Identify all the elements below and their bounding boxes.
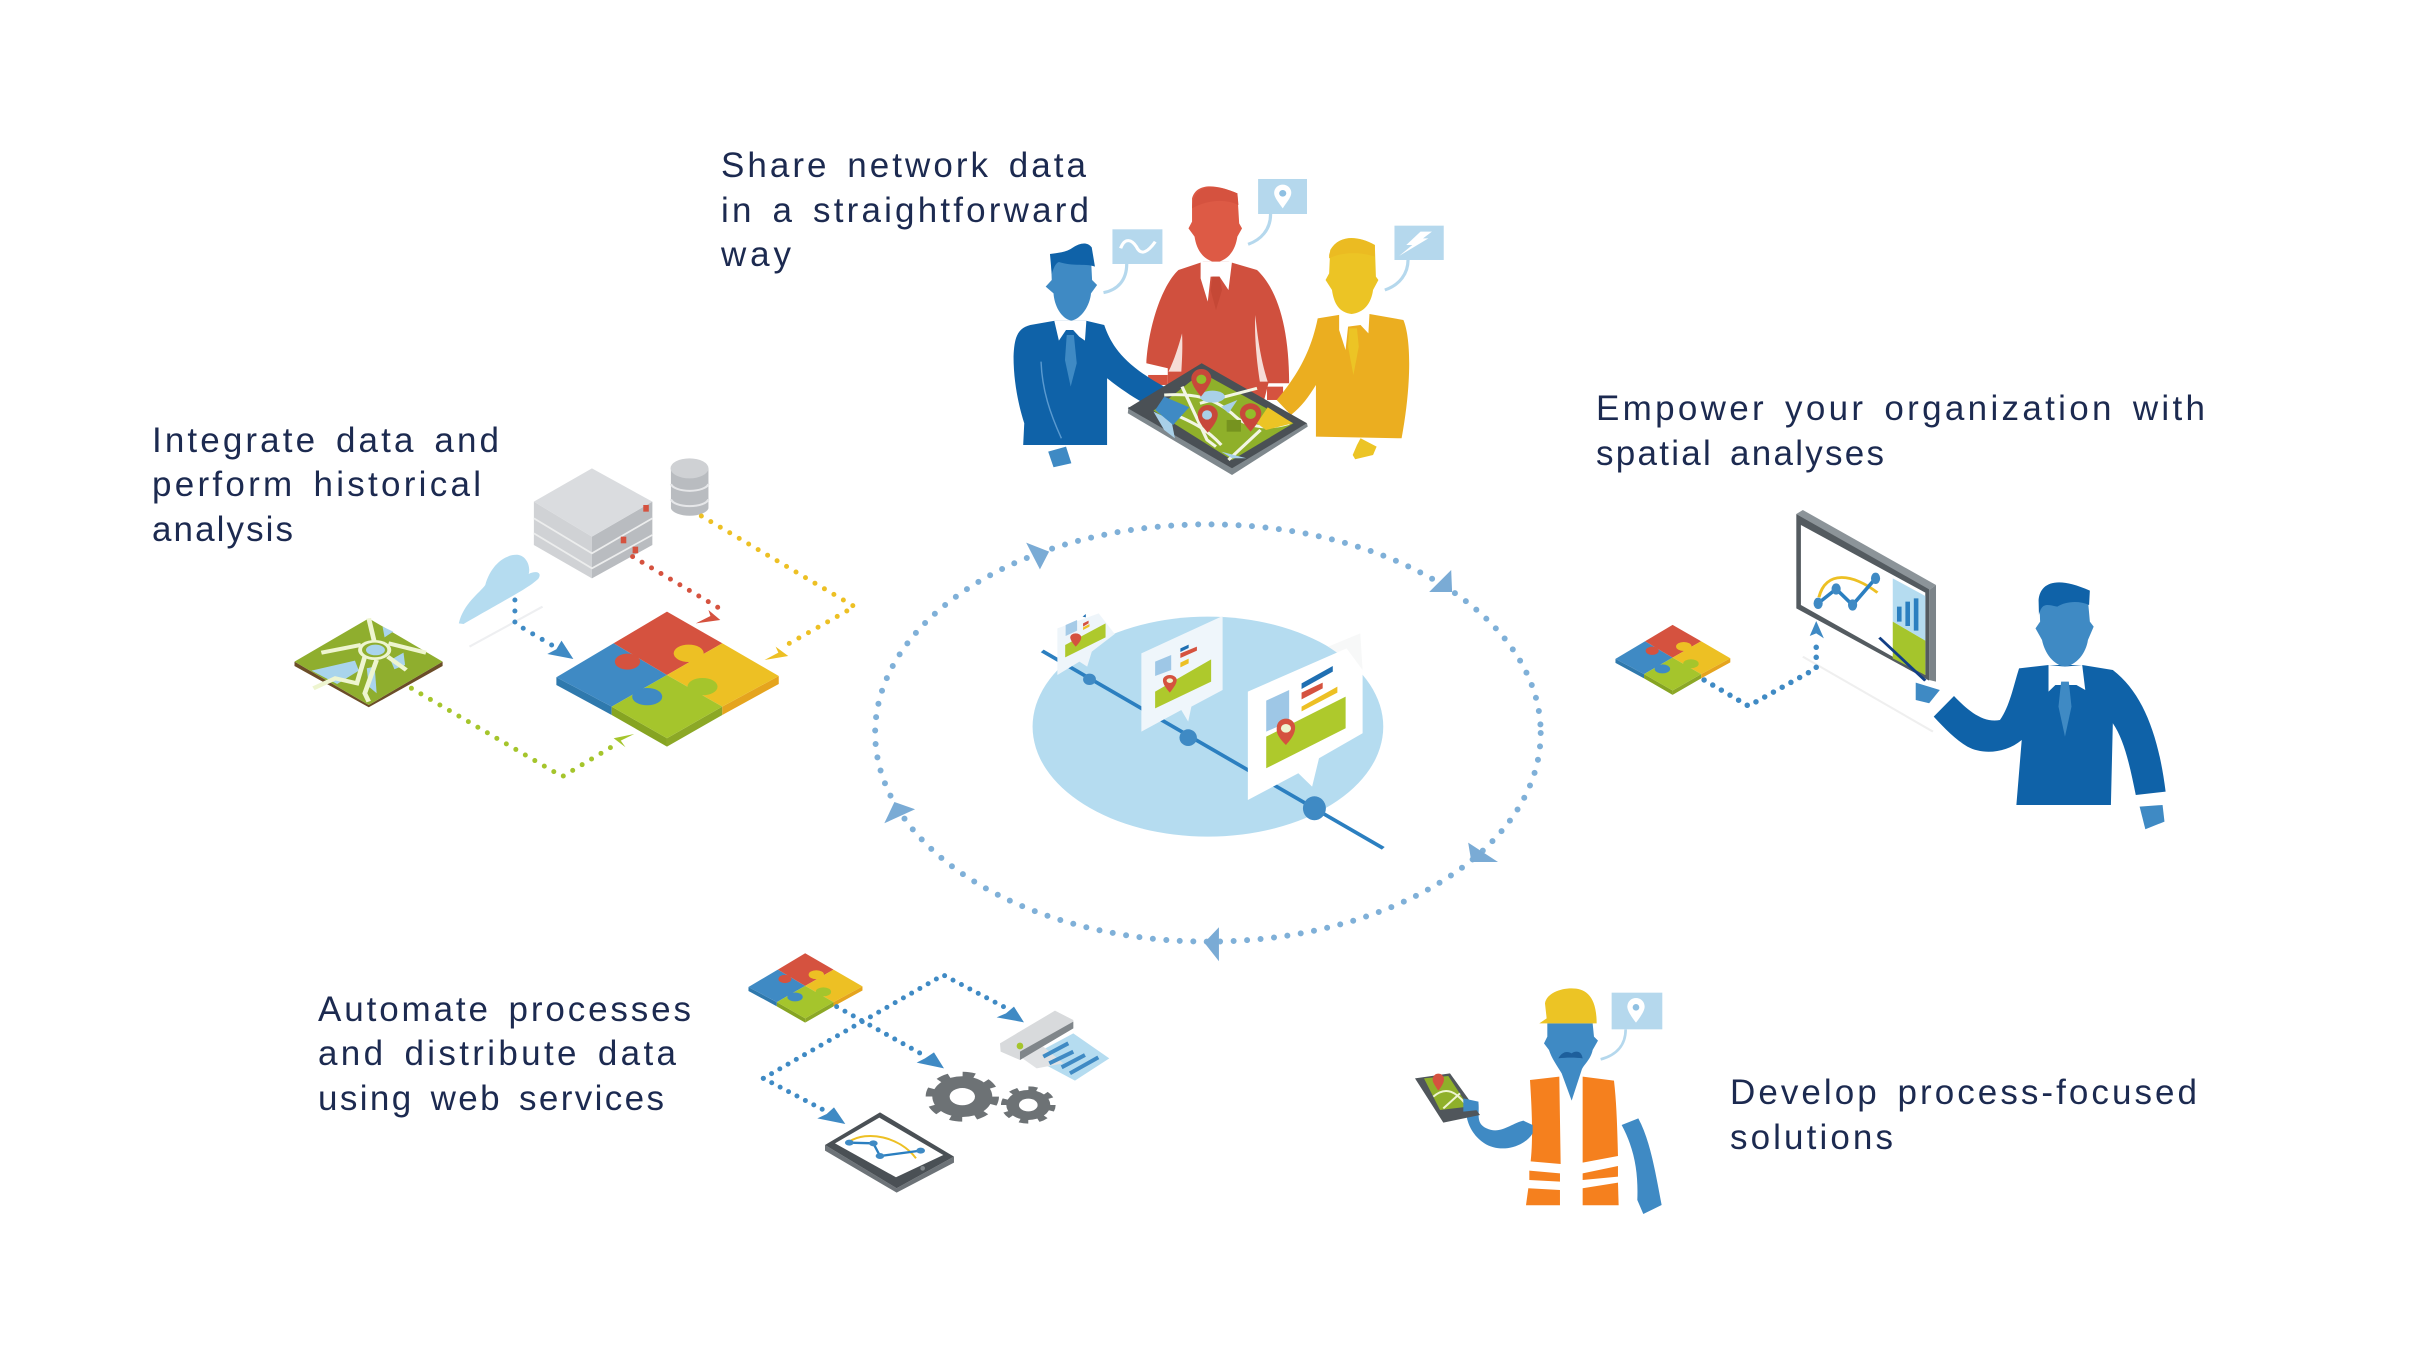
- shadow: [1803, 657, 1933, 732]
- illustration: field worker: [1415, 988, 1662, 1214]
- heading: share network data: way: [720, 235, 792, 274]
- heading: automate processes: Automate processes: [318, 990, 691, 1029]
- illustration: data integration: [294, 458, 855, 777]
- small puzzle: [1615, 625, 1730, 695]
- heading: develop solutions: solutions: [1730, 1118, 1893, 1157]
- illustration: three colleagues around a map tablet: [1014, 179, 1444, 475]
- bubble: pin: [1248, 179, 1307, 244]
- heading: automate processes: using web services: [318, 1079, 664, 1118]
- presenter: [1916, 582, 2166, 829]
- gears: [930, 1074, 1052, 1121]
- arrow: server to puzzle: [633, 557, 722, 623]
- card: small: [1057, 613, 1115, 675]
- worker head: [1544, 1023, 1598, 1101]
- tablet with map: [1128, 363, 1308, 475]
- cycle arrows: [884, 543, 1498, 961]
- moustache: [1558, 1052, 1583, 1058]
- arm with phone: [1415, 1073, 1533, 1148]
- heading: share network data: [720, 146, 1089, 274]
- bubble: lightning: [1385, 226, 1444, 290]
- arrow: split to printer: [763, 975, 1024, 1078]
- cloud: [459, 555, 543, 647]
- illustration: presenter with dashboard: [1615, 510, 2166, 829]
- bubble: wave: [1104, 229, 1162, 293]
- illustration: automation: [748, 953, 1109, 1193]
- arrow: cloud to puzzle: [515, 600, 573, 659]
- heading: integrate data: perform historical: [152, 465, 481, 504]
- heading: share network data: Share network data: [721, 146, 1087, 185]
- printer: [1000, 1011, 1109, 1081]
- arrow: split to tablet: [763, 1078, 845, 1124]
- card: medium: [1141, 616, 1223, 732]
- puzzle: [556, 612, 779, 747]
- person: blue: [1014, 243, 1164, 467]
- tablet: [825, 1112, 954, 1193]
- map tile: [294, 618, 443, 707]
- heading: share network data: in a straightforward: [721, 191, 1089, 230]
- person: red: [1146, 186, 1289, 400]
- heading: develop solutions: Develop process-focused: [1730, 1073, 2197, 1112]
- heading: integrate data: [152, 421, 499, 549]
- heading: develop solutions: [1730, 1073, 2197, 1157]
- centre disc: [1033, 617, 1383, 837]
- monitor: [1796, 510, 1936, 682]
- hard hat: [1539, 988, 1597, 1023]
- cycle ring: [875, 524, 1541, 942]
- safety vest: [1526, 1077, 1619, 1205]
- heading: integrate data: Integrate data and: [152, 421, 499, 460]
- timeline: [1042, 651, 1383, 848]
- arrow: puzzle to gears: [837, 1007, 944, 1068]
- central cycle: [875, 524, 1541, 961]
- arrow: database to puzzle: [701, 516, 855, 660]
- arrow: map to puzzle: [411, 688, 634, 777]
- heading: empower organization: [1596, 389, 2205, 473]
- heading: empower organization: spatial analyses: [1596, 434, 1884, 473]
- server stack: [534, 468, 652, 578]
- heading: integrate data: analysis: [152, 510, 293, 549]
- arrow: puzzle to monitor: [1704, 621, 1824, 706]
- person: yellow: [1277, 238, 1409, 459]
- small puzzle: [748, 953, 862, 1023]
- bubble: pin: [1601, 993, 1662, 1059]
- other arm: [1622, 1118, 1662, 1214]
- heading: automate processes: and distribute data: [318, 1034, 677, 1073]
- database: [671, 458, 708, 516]
- card: large: [1248, 633, 1363, 800]
- heading: automate processes: [318, 990, 691, 1118]
- heading: empower organization: Empower your organization with: [1596, 389, 2205, 428]
